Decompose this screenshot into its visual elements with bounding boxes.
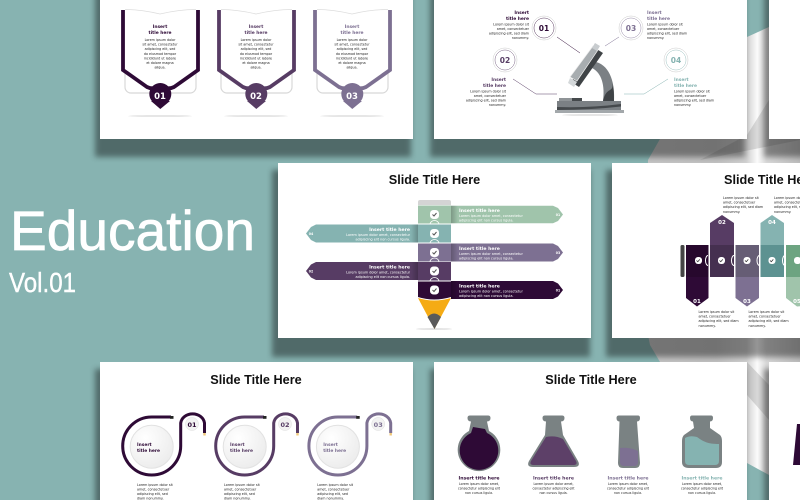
arrow bar 05: 01 xyxy=(556,288,560,292)
ring step 03: adipiscing elit, sed xyxy=(317,492,348,496)
panel: shield cards slide xyxy=(100,0,413,139)
arrow bar 02: Lorem ipsum dolor amet, consectetur xyxy=(346,270,411,274)
text blocks: Lorem ipsum dolor sit xyxy=(748,310,785,314)
ring step 02: 02 xyxy=(280,421,290,429)
flask 4: consectetur adipiscing elit xyxy=(681,486,724,490)
arrow bar 02 xyxy=(306,262,418,280)
flask 3: Insert title here xyxy=(608,476,648,482)
ring step 01: 01 xyxy=(187,421,197,429)
ribbon 02 xyxy=(710,215,734,277)
callout 03: Lorem ipsum dolor sit xyxy=(647,22,684,26)
panel: microscope slide xyxy=(434,0,747,139)
card 03: et dolore magna xyxy=(338,61,366,65)
card 01: 01 xyxy=(154,92,166,102)
card 03: incididunt ut labore xyxy=(336,56,368,60)
text blocks: Lorem ipsum dolor sit xyxy=(698,310,735,314)
card 03: 03 xyxy=(346,92,358,102)
card 02: Insert xyxy=(249,24,263,30)
heading: Education Vol.01: Education xyxy=(10,199,255,262)
text blocks: amet, consectetuer xyxy=(698,314,731,318)
callout 03: Insert xyxy=(647,10,662,16)
number labels: 01 xyxy=(693,299,701,305)
ribbon 01 xyxy=(686,245,708,306)
ring step 02: adipiscing elit, sed xyxy=(224,492,255,496)
callout 02: adipiscing elit, sed diam xyxy=(466,98,506,102)
check icons xyxy=(695,257,800,264)
arrow bar 02: adipiscing elit non cursus ligula. xyxy=(356,275,410,279)
callout 03: title here xyxy=(647,16,670,22)
card 01: et dolore magna xyxy=(146,61,174,65)
arrow bar 01: Insert title here xyxy=(459,208,500,214)
arrow bar 05: adipiscing elit non cursus ligula. xyxy=(459,294,514,298)
panel: partial slide top right xyxy=(769,0,800,139)
card 03: Lorem ipsum dolor xyxy=(337,38,368,42)
flask 2: Lorem ipsum dolor amet, xyxy=(533,482,574,486)
arrow bar 05: Insert title here xyxy=(459,284,500,290)
arrow bar 01 xyxy=(451,206,563,223)
text blocks: Lorem ipsum dolor sit xyxy=(723,196,760,200)
card 03: do eiusmod tempor xyxy=(336,52,369,56)
flask 1: Insert title here xyxy=(459,476,499,482)
arrow bar 03 xyxy=(451,244,563,262)
card 02: incididunt ut labore xyxy=(240,56,272,60)
card 01: aliqua. xyxy=(154,66,166,70)
heading: Education Vol.01 xyxy=(9,199,255,298)
text blocks xyxy=(698,196,800,328)
callout 03: amet, consectetuer xyxy=(647,27,680,31)
number labels: 04 xyxy=(768,220,776,226)
card 02: 02 xyxy=(250,92,262,102)
card 01: title here xyxy=(149,30,171,36)
ring step 01: Lorem ipsum dolor sit xyxy=(137,483,174,487)
flask 3: non cursus ligula. xyxy=(614,491,642,495)
callout 04: nonummy. xyxy=(674,103,691,107)
callout 04: amet, consectetuer xyxy=(674,94,707,98)
panel: pencil slide xyxy=(278,163,591,338)
arrow bar 01: 01 xyxy=(556,213,560,217)
arrow bar 04: adipiscing elit non cursus ligula. xyxy=(356,238,410,242)
panel: ribbon timeline slide xyxy=(612,163,800,338)
ring step 02: title here xyxy=(230,448,253,454)
pencil graphic xyxy=(416,200,452,330)
card 01 xyxy=(123,10,198,117)
number labels: 02 xyxy=(718,220,726,226)
card 02: adipiscing elit, sed xyxy=(241,47,271,51)
callout 02: nonummy. xyxy=(489,103,506,107)
ring step 03: Insert xyxy=(323,442,338,448)
text blocks: nonummy. xyxy=(748,324,766,328)
flask 3: Lorem ipsum dolor amet, xyxy=(608,482,648,486)
arrow bar 05 xyxy=(451,281,563,299)
arrow bar 03: 03 xyxy=(556,251,560,255)
heading: Slide Title Here xyxy=(389,173,480,187)
arrow bar 01: adipiscing elit non cursus ligula. xyxy=(459,218,514,222)
ring step 01: Insert xyxy=(137,442,152,448)
flask 4 xyxy=(681,416,724,495)
card 03: adipiscing elit, sed xyxy=(337,47,367,51)
ribbon 04 xyxy=(760,215,784,277)
text blocks: adipiscing elit, sed diam xyxy=(723,205,763,209)
callout 02 xyxy=(466,48,557,107)
callout 01: Lorem ipsum dolor sit xyxy=(493,22,530,26)
text blocks: nonummy. xyxy=(774,210,791,214)
callout 01: title here xyxy=(506,16,529,22)
callout 04: 04 xyxy=(671,56,681,65)
ribbon 05 xyxy=(786,245,800,306)
icon: microscope xyxy=(555,43,624,116)
callout 03 xyxy=(605,10,687,46)
ring step 03: amet, consectetuer xyxy=(317,488,350,492)
ring step 03: Lorem ipsum dolor sit xyxy=(317,483,354,487)
arrow bar 02: 02 xyxy=(309,270,313,274)
flask 3 xyxy=(607,416,650,495)
number labels: 03 xyxy=(743,299,751,305)
heading: Education Vol.01: Vol.01 xyxy=(9,267,76,298)
callout 03: 03 xyxy=(626,24,636,33)
text blocks: nonummy. xyxy=(698,324,716,328)
card 03 xyxy=(315,10,390,117)
overlap band xyxy=(686,245,800,277)
card 02: do eiusmod tempor xyxy=(240,52,273,56)
text blocks: nonummy. xyxy=(723,210,740,214)
card 01: Lorem ipsum dolor xyxy=(145,38,176,42)
ring step 02: Insert xyxy=(230,442,245,448)
flask 2: Insert title here xyxy=(533,476,574,482)
card 01: incididunt ut labore xyxy=(144,56,176,60)
callout 01: Insert xyxy=(514,10,529,16)
ring step 02: Lorem ipsum dolor sit xyxy=(224,483,261,487)
heading: Slide Title Here xyxy=(210,373,302,387)
callout 04: Lorem ipsum dolor sit xyxy=(674,90,711,94)
arrow bar 03: Insert title here xyxy=(459,246,500,252)
text blocks: adipiscing elit, sed diam xyxy=(748,319,789,323)
card 01: do eiusmod tempor xyxy=(144,52,177,56)
flask 2: consectetur adipiscing elit xyxy=(532,486,575,490)
flask 2: non cursus ligula. xyxy=(539,491,568,495)
heading: Slide Title Here xyxy=(545,373,637,387)
callout 02: amet, consectetuer xyxy=(474,94,507,98)
card 03: aliqua. xyxy=(346,66,358,70)
ring step 03 xyxy=(309,414,392,500)
flask 2 xyxy=(528,416,579,495)
callout 04 xyxy=(624,48,714,107)
check icons xyxy=(430,210,439,294)
arrow bar 02: Insert title here xyxy=(369,264,410,270)
ribbon cap xyxy=(680,245,684,277)
callout 02: 02 xyxy=(500,56,510,65)
card 02: et dolore magna xyxy=(242,61,270,65)
card 01: adipiscing elit, sed xyxy=(145,47,175,51)
flask 1 xyxy=(458,416,501,495)
callout 01: amet, consectetuer xyxy=(497,27,530,31)
card 02: title here xyxy=(245,30,267,36)
callout 01: adipiscing elit, sed diam xyxy=(489,32,529,36)
arrow bar 04: Lorem ipsum dolor amet, consectetur xyxy=(346,233,411,237)
card 03: title here xyxy=(341,30,363,36)
panel: flasks slide xyxy=(434,362,747,500)
ring step 02 xyxy=(216,414,299,500)
ring step 03: title here xyxy=(323,448,346,454)
ring step 01: adipiscing elit, sed xyxy=(137,492,168,496)
flask 1: non cursus ligula. xyxy=(465,491,493,495)
flask 1: consectetur adipiscing elit xyxy=(458,486,501,490)
arrow bar 04: 04 xyxy=(309,232,314,236)
card 01: sit amet, consectetur xyxy=(142,43,178,47)
ring step 01: amet, consectetuer xyxy=(137,488,170,492)
arrow bar 03: Lorem ipsum dolor amet, consectetur xyxy=(459,252,523,256)
callout 02: Insert xyxy=(491,77,506,83)
callout 02: Lorem ipsum dolor sit xyxy=(470,90,507,94)
flask 1: Lorem ipsum dolor amet, xyxy=(459,482,499,486)
flask 4: non cursus ligula. xyxy=(688,491,716,495)
callout 01: nonummy. xyxy=(512,36,529,40)
arrow bar 04 xyxy=(306,224,418,242)
callout 02: title here xyxy=(483,83,506,89)
card 01: Insert xyxy=(153,24,167,30)
flask 4: Lorem ipsum dolor amet, xyxy=(682,482,722,486)
callout 03: adipiscing elit, sed diam xyxy=(647,32,687,36)
text blocks: adipiscing elit, sed diam xyxy=(698,319,739,323)
card 03: sit amet, consectetur xyxy=(334,43,370,47)
card 03: Insert xyxy=(345,24,359,30)
callout 04: title here xyxy=(674,83,697,89)
card 02: sit amet, consectetur xyxy=(238,43,274,47)
card 02: Lorem ipsum dolor xyxy=(241,38,272,42)
ribbon 03 xyxy=(736,245,759,306)
arrow bar 04: Insert title here xyxy=(369,227,410,233)
card 02 xyxy=(219,10,294,117)
ring step 02: amet, consectetuer xyxy=(224,488,257,492)
callout 01 xyxy=(489,10,580,53)
flask 3: consectetur adipiscing elit xyxy=(607,486,650,490)
card 02: aliqua. xyxy=(250,66,262,70)
flask 4: Insert title here xyxy=(682,476,722,482)
ring step 03: 03 xyxy=(374,421,383,429)
callout 04: Insert xyxy=(674,77,689,83)
ring step 01 xyxy=(123,414,206,500)
text blocks: amet, consectetuer xyxy=(748,314,781,318)
callout 04: adipiscing elit, sed diam xyxy=(674,98,714,102)
arrow bar 01: Lorem ipsum dolor amet, consectetur xyxy=(459,214,523,218)
ring step 01: title here xyxy=(137,448,160,454)
text blocks: amet, consectetuer xyxy=(723,200,756,204)
callout 01: 01 xyxy=(539,24,549,33)
callout 03: nonummy. xyxy=(647,36,664,40)
number labels xyxy=(693,220,800,305)
arrow bar 05: Lorem ipsum dolor amet, consectetur xyxy=(459,290,523,294)
panel: ring steps slide xyxy=(100,362,413,500)
arrow bar 03: adipiscing elit non cursus ligula. xyxy=(459,256,514,260)
panel: partial slide bottom right xyxy=(769,362,800,500)
